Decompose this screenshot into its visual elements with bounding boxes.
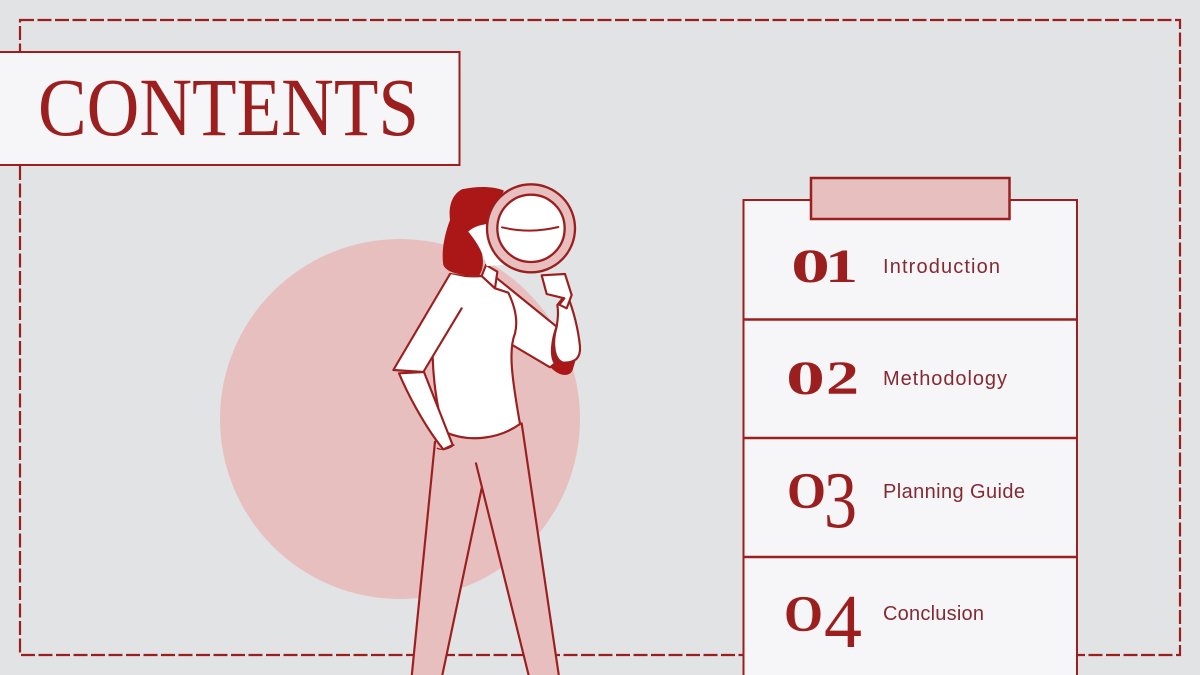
left forearm bbox=[399, 372, 453, 449]
title banner bbox=[0, 52, 460, 165]
clipboard body bbox=[744, 200, 1077, 675]
magnifier handle and hand bbox=[542, 274, 572, 308]
neck and collar bbox=[482, 265, 497, 288]
item 03: 0 bbox=[787, 462, 826, 518]
face bbox=[468, 223, 503, 266]
illustration: woman with magnifying glass bbox=[393, 184, 580, 675]
raised forearm bbox=[554, 293, 580, 363]
item 01: Introduction bbox=[883, 256, 1000, 278]
shoulder sleeve bbox=[393, 274, 480, 372]
item 04: 4 bbox=[824, 580, 862, 664]
item 01 bbox=[791, 240, 1000, 293]
item 02: Methodology bbox=[883, 368, 1007, 390]
trousers bbox=[411, 423, 559, 675]
item 03 bbox=[787, 457, 1025, 545]
item 01: 1 bbox=[825, 240, 858, 293]
item 03: 3 bbox=[824, 457, 857, 545]
title: CONTENTS bbox=[38, 61, 419, 153]
item 01: 0 bbox=[791, 240, 830, 293]
item 04 bbox=[784, 580, 984, 664]
shirt body bbox=[433, 274, 520, 438]
background circle bbox=[220, 239, 580, 599]
raised upper arm bbox=[493, 277, 557, 367]
item 02 bbox=[786, 352, 1007, 405]
magnifying glass bbox=[487, 184, 575, 272]
item 03: Planning Guide bbox=[883, 481, 1025, 503]
item 02: 2 bbox=[826, 352, 859, 405]
hair bbox=[443, 187, 504, 275]
item 02: 0 bbox=[786, 352, 825, 405]
clipboard list bbox=[743, 178, 1078, 675]
item 04: 0 bbox=[784, 585, 823, 641]
clipboard tab bbox=[811, 178, 1010, 219]
item 04: Conclusion bbox=[883, 603, 984, 625]
red cuff bbox=[546, 327, 577, 375]
hand in pocket bbox=[437, 445, 454, 449]
